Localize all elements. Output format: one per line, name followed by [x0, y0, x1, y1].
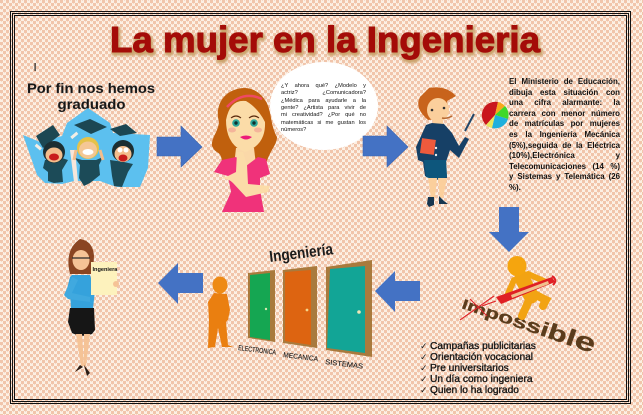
heading: Por fin nos hemos graduado: Por fin nos hemos — [27, 80, 155, 96]
icon: thinking orange figure — [208, 276, 233, 348]
list: actions: Orientación vocacional — [430, 352, 533, 363]
list: actions: Pre universitarios — [430, 363, 509, 374]
text: ministry statistics: (10%),Electrónica y — [509, 151, 620, 160]
heading: Por fin nos hemos graduado — [27, 80, 155, 112]
list: actions: Quien lo ha logrado — [430, 385, 519, 396]
title: La mujer en la Ingenieria — [110, 19, 541, 60]
heading: Por fin nos hemos graduado: graduado — [58, 96, 126, 112]
list: actions: Campañas publicitarias — [430, 341, 536, 352]
text: thought bubble questions — [281, 83, 366, 133]
icon: graduates celebrating — [23, 108, 150, 187]
list: actions: Un día como ingeniera — [430, 374, 533, 385]
text: thought bubble questions: ¿Médica para ayudarle a la — [281, 98, 366, 104]
arrow: left from doors — [375, 271, 420, 312]
text: ministry statistics: %). — [509, 183, 521, 192]
icon: woman engineer — [64, 239, 119, 376]
text: thought bubble questions: mi creatividad? ¿Por qué no — [281, 112, 366, 118]
cursor mark — [34, 63, 36, 71]
arrow: down to impossible — [489, 207, 529, 252]
text: ministry statistics: una cifra alarmante: la — [509, 98, 620, 107]
text: ministry statistics — [509, 77, 620, 192]
icon: figure rewriting impossible — [459, 256, 600, 359]
text: ministry statistics: dibuja esta situación con — [509, 88, 620, 97]
text: ministry statistics: y Sistemas y Telemática (26 — [509, 172, 620, 181]
list: actions: ✓ — [420, 374, 428, 384]
door labels: MECANICA — [283, 352, 319, 363]
list: actions: ✓ — [420, 363, 428, 373]
door labels — [238, 345, 364, 371]
icon: door electronica — [248, 270, 275, 342]
title: La mujer en la Ingenieria — [111, 21, 542, 62]
arrow: to teacher — [363, 126, 408, 167]
text: thought bubble questions: actriz? ¿Comunicadora? — [281, 90, 366, 96]
thought bubble — [270, 62, 378, 150]
impossible word: Impossible — [459, 286, 600, 359]
list: actions: ✓ — [420, 341, 428, 351]
arrow: left to engineer — [158, 263, 203, 304]
text: ministry statistics: es la Ingeniería Mecánica — [509, 130, 620, 139]
text: ministry statistics: Telecomunicaciones (14 %) — [509, 162, 620, 171]
icon: teacher — [416, 87, 474, 207]
text: thought bubble questions: ¿Y ahora qué? ¿Modelo y — [281, 83, 366, 89]
door labels: ELECTRONICA — [238, 345, 277, 357]
list: actions: ✓ — [420, 352, 428, 362]
heading: Ingenieria: Ingeniería — [268, 241, 334, 266]
list: actions: ✓ — [420, 385, 428, 395]
arrow: to thinking woman — [157, 126, 202, 167]
icon: door mecanica — [283, 266, 317, 348]
door labels: SISTEMAS — [325, 359, 364, 371]
text: thought bubble questions: números? — [281, 127, 306, 133]
text: ministry statistics: El Ministerio de Educación, — [509, 77, 620, 86]
icon: thinking woman — [212, 88, 277, 212]
icon: pie chart — [482, 102, 509, 128]
icon: door sistemas — [326, 260, 372, 357]
text: ministry statistics: de matrículas por mujeres — [509, 119, 620, 128]
text: ministry statistics: carrera con menor número — [509, 109, 620, 118]
paper label: Ingeniera — [92, 267, 118, 273]
text: thought bubble questions: gente? ¿Artista para vivir de — [281, 105, 366, 111]
text: ministry statistics: (5%),seguida de la Eléctrica — [509, 141, 620, 150]
text: thought bubble questions: matemáticas si me gustan los — [281, 120, 366, 126]
list: actions — [420, 341, 536, 396]
